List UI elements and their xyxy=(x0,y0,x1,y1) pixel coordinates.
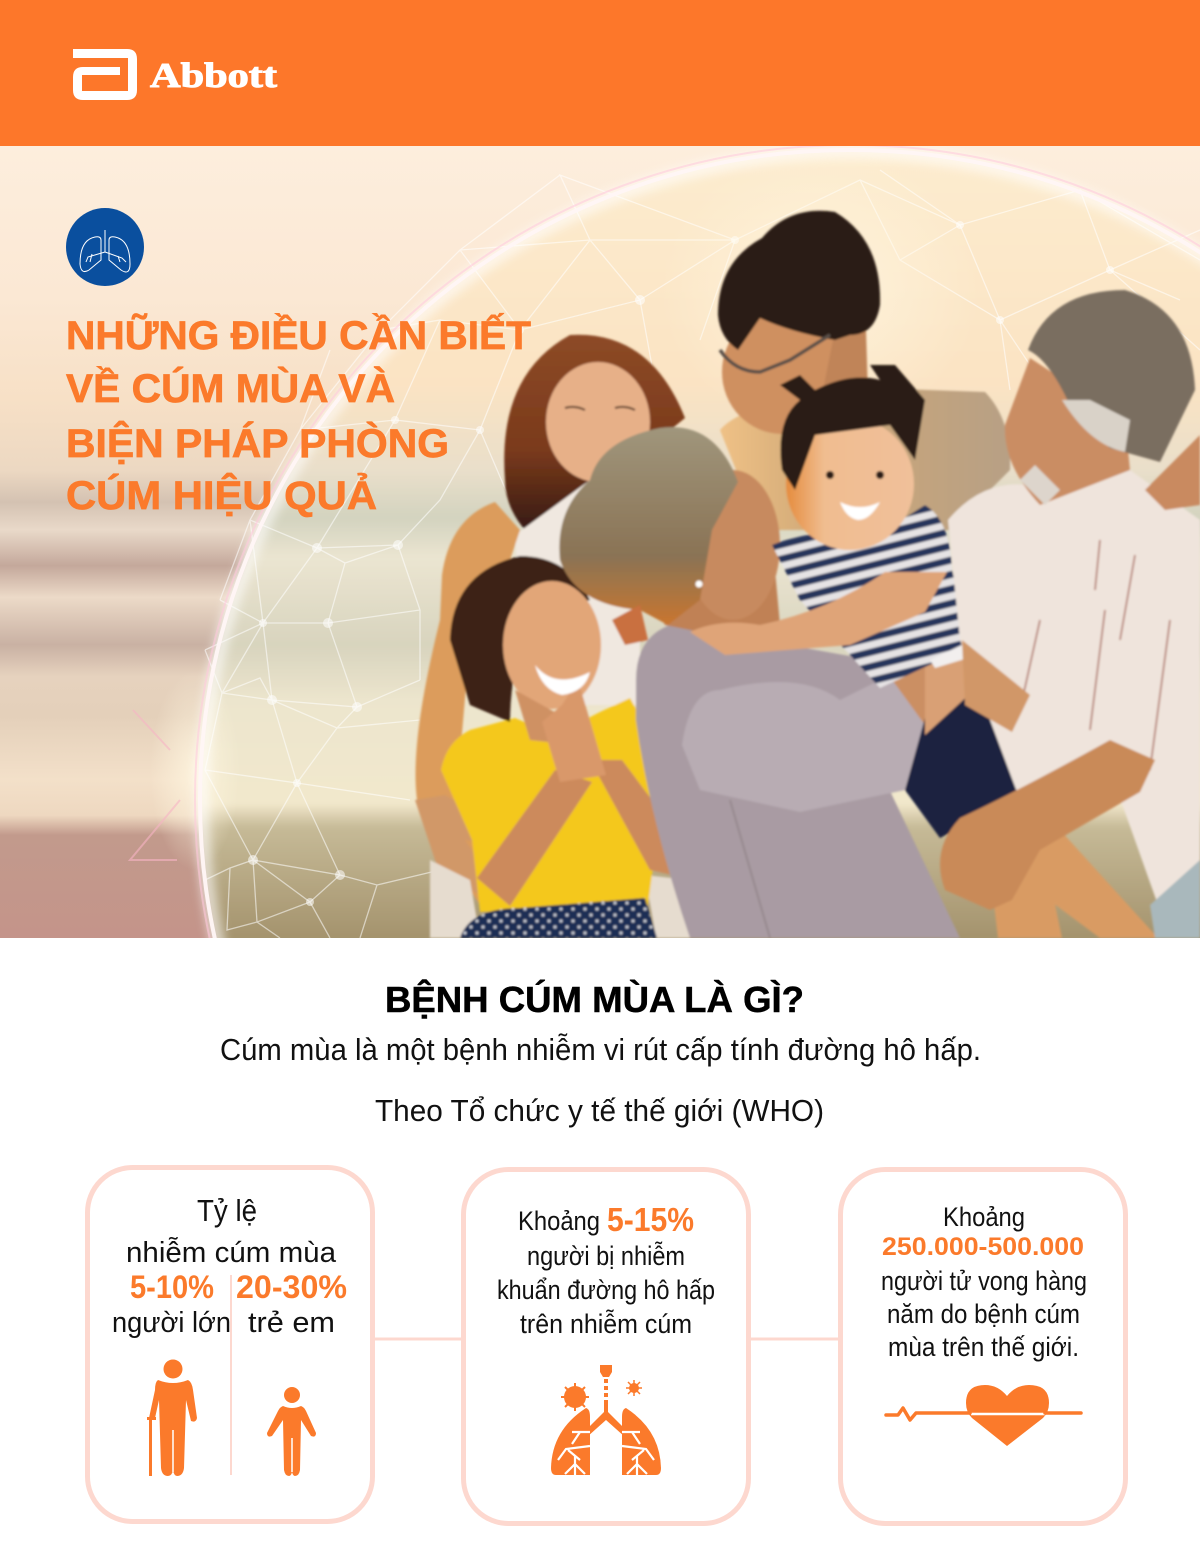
icon: elderly adult with cane xyxy=(147,1360,197,1476)
panel: bacterial infection share: người bị nhiễm xyxy=(527,1240,685,1271)
toddler xyxy=(990,830,1158,938)
panel: infection rate xyxy=(88,1168,372,1522)
panel: infection rate: 5-10% xyxy=(130,1269,214,1305)
intro text: Cúm mùa là một bệnh nhiễm vi rút cấp tính đường hô hấp. xyxy=(220,1032,981,1067)
panel: bacterial infection share xyxy=(464,1170,748,1524)
panel: annual deaths: 250.000-500.000 xyxy=(882,1233,1084,1261)
network lines xyxy=(205,170,1200,938)
icon: heart with pulse line xyxy=(886,1385,1081,1446)
connectors xyxy=(375,1338,839,1340)
header band xyxy=(0,0,1200,146)
panel: infection rate: Tỷ lệ xyxy=(197,1193,257,1228)
panel: annual deaths xyxy=(840,1170,1126,1524)
grandmother xyxy=(636,622,960,938)
title: CÚM HIỆU QUẢ xyxy=(66,472,377,518)
icon: lungs with viruses xyxy=(551,1365,661,1475)
teen girl xyxy=(504,335,685,545)
hero photo: family under protective dome xyxy=(0,146,1200,938)
panel: bacterial infection share: 5-15% xyxy=(607,1201,694,1238)
panel: bacterial infection share: Khoảng xyxy=(518,1206,600,1236)
panel: bacterial infection share: khuẩn đường hô hấp xyxy=(497,1275,715,1305)
panel: annual deaths: mùa trên thế giới. xyxy=(888,1332,1079,1362)
title: NHỮNG ĐIỀU CẦN BIẾT xyxy=(66,312,531,358)
title: BIỆN PHÁP PHÒNG xyxy=(66,420,449,466)
grandfather xyxy=(948,470,1200,938)
panel: annual deaths: Khoảng xyxy=(943,1202,1025,1232)
Abbott logo xyxy=(73,49,277,100)
title: VỀ CÚM MÙA VÀ xyxy=(66,365,395,411)
panel: infection rate: 20-30% xyxy=(236,1269,347,1305)
title xyxy=(66,312,531,518)
panel: annual deaths: người tử vong hàng xyxy=(881,1266,1087,1296)
icon: lungs badge xyxy=(66,208,144,286)
icon: child xyxy=(267,1387,316,1476)
panel: annual deaths: năm do bệnh cúm xyxy=(887,1299,1080,1329)
halo around heads xyxy=(758,223,915,368)
panel: infection rate: nhiễm cúm mùa xyxy=(126,1236,337,1269)
pink triangle xyxy=(130,710,180,860)
panel: infection rate: người lớn xyxy=(112,1307,231,1339)
source line: Theo Tổ chức y tế thế giới (WHO) xyxy=(375,1093,824,1128)
section heading: BỆNH CÚM MÙA LÀ GÌ? xyxy=(385,978,804,1020)
young man xyxy=(720,388,1010,530)
panel: infection rate: trẻ em xyxy=(248,1307,335,1339)
girl in yellow xyxy=(441,698,662,912)
dome edge xyxy=(191,146,1200,938)
panel: bacterial infection share: trên nhiễm cúm xyxy=(520,1308,692,1339)
Abbott logo: Abbott xyxy=(150,56,277,95)
sun glow near dome edge xyxy=(166,697,224,858)
dome interior xyxy=(203,155,1200,938)
